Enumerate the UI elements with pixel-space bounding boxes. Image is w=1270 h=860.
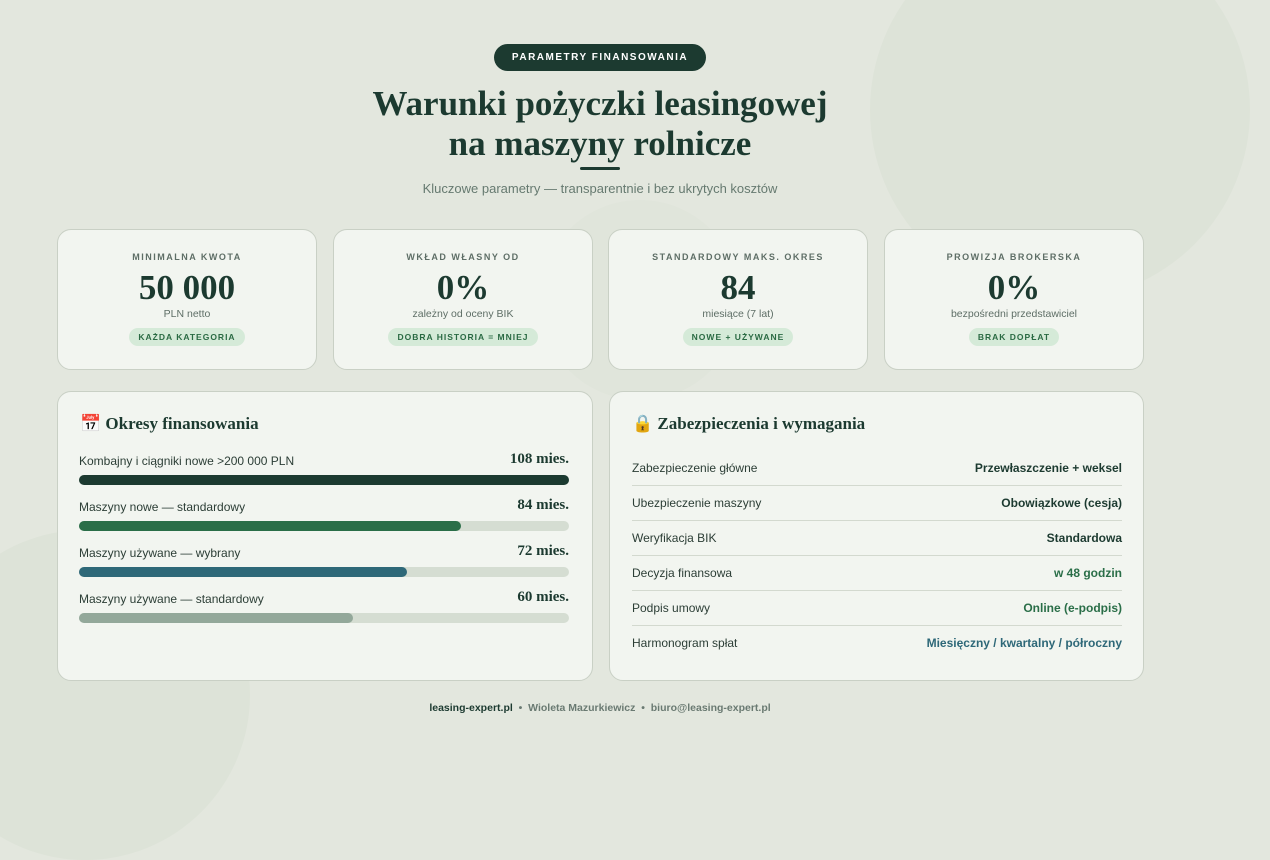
- footer: leasing-expert.pl • Wioleta Mazurkiewicz • biuro@leasing-expert.pl: [429, 702, 771, 714]
- card: okres: 84: [720, 268, 756, 307]
- panel: zabezpieczenia: Obowiązkowe (cesja): [1001, 496, 1122, 510]
- panel: zabezpieczenia: Standardowa: [1047, 531, 1122, 545]
- title: [372, 84, 828, 163]
- heading: 🔒 Zabezpieczenia i wymagania: [632, 414, 865, 433]
- bar row 2: Maszyny nowe — standardowy: [79, 500, 245, 514]
- rows: Przewłaszczenie + weksel: [975, 461, 1122, 475]
- card: wkład własny: zależny od oceny BIK: [412, 308, 513, 320]
- panel: zabezpieczenia: Harmonogram spłat: [632, 636, 737, 650]
- bar row 3: 72 mies.: [517, 543, 569, 559]
- card: wkład własny: 0%: [437, 268, 489, 307]
- card: okres: NOWE + UŻYWANE: [692, 332, 784, 342]
- card: minimalna kwota: MINIMALNA KWOTA: [132, 252, 242, 262]
- badge: PARAMETRY FINANSOWANIA: [512, 52, 688, 63]
- bar row 1: 108 mies.: [510, 451, 569, 467]
- bar row 4: 60 mies.: [517, 589, 569, 605]
- card: prowizja: bezpośredni przedstawiciel: [951, 308, 1077, 320]
- bar row 3: [79, 543, 569, 577]
- panel: zabezpieczenia: Decyzja finansowa: [632, 566, 732, 580]
- underline accent: [580, 167, 620, 170]
- title: na maszyny rolnicze: [449, 124, 751, 163]
- card: wkład własny: [333, 229, 593, 370]
- title: Warunki pożyczki leasingowej: [372, 84, 828, 123]
- card: okres: [608, 229, 868, 370]
- panel: zabezpieczenia: Miesięczny / kwartalny / półroczny: [927, 636, 1122, 650]
- bar row 2: 84 mies.: [517, 497, 569, 513]
- card: wkład własny: DOBRA HISTORIA = MNIEJ: [397, 332, 529, 342]
- bar row 1: Kombajny i ciągniki nowe >200 000 PLN: [79, 454, 294, 468]
- rows: [632, 451, 1122, 486]
- card: prowizja: BRAK DOPŁAT: [978, 332, 1050, 342]
- heading: 📅 Okresy finansowania: [80, 414, 259, 433]
- bar row 4: Maszyny używane — standardowy: [79, 592, 264, 606]
- panel: zabezpieczenia: [609, 391, 1144, 681]
- card: prowizja: PROWIZJA BROKERSKA: [947, 252, 1081, 262]
- panel: zabezpieczenia: Weryfikacja BIK: [632, 531, 716, 545]
- panel: zabezpieczenia: Ubezpieczenie maszyny: [632, 496, 761, 510]
- card: prowizja: 0%: [988, 268, 1040, 307]
- card: minimalna kwota: KAŻDA KATEGORIA: [138, 332, 236, 342]
- bar row 1: [79, 451, 569, 485]
- rows: Zabezpieczenie główne: [632, 461, 757, 475]
- bar row 3: Maszyny używane — wybrany: [79, 546, 240, 560]
- bar row 2: [79, 497, 569, 531]
- card: minimalna kwota: [57, 229, 317, 370]
- card: okres: miesiące (7 lat): [702, 308, 774, 320]
- panel: zabezpieczenia: w 48 godzin: [1054, 566, 1122, 580]
- card: minimalna kwota: PLN netto: [164, 308, 210, 320]
- bar row 4: [79, 589, 569, 623]
- panel: zabezpieczenia: Online (e-podpis): [1023, 601, 1122, 615]
- card: minimalna kwota: 50 000: [139, 268, 235, 307]
- panel: zabezpieczenia: Podpis umowy: [632, 601, 710, 615]
- panel: okresy finansowania: [57, 391, 593, 681]
- subtitle: Kluczowe parametry — transparentnie i bez ukrytych kosztów: [423, 181, 777, 196]
- card: wkład własny: WKŁAD WŁASNY OD: [406, 252, 520, 262]
- card: okres: STANDARDOWY MAKS. OKRES: [652, 252, 824, 262]
- badge: [494, 44, 706, 71]
- card: prowizja: [884, 229, 1144, 370]
